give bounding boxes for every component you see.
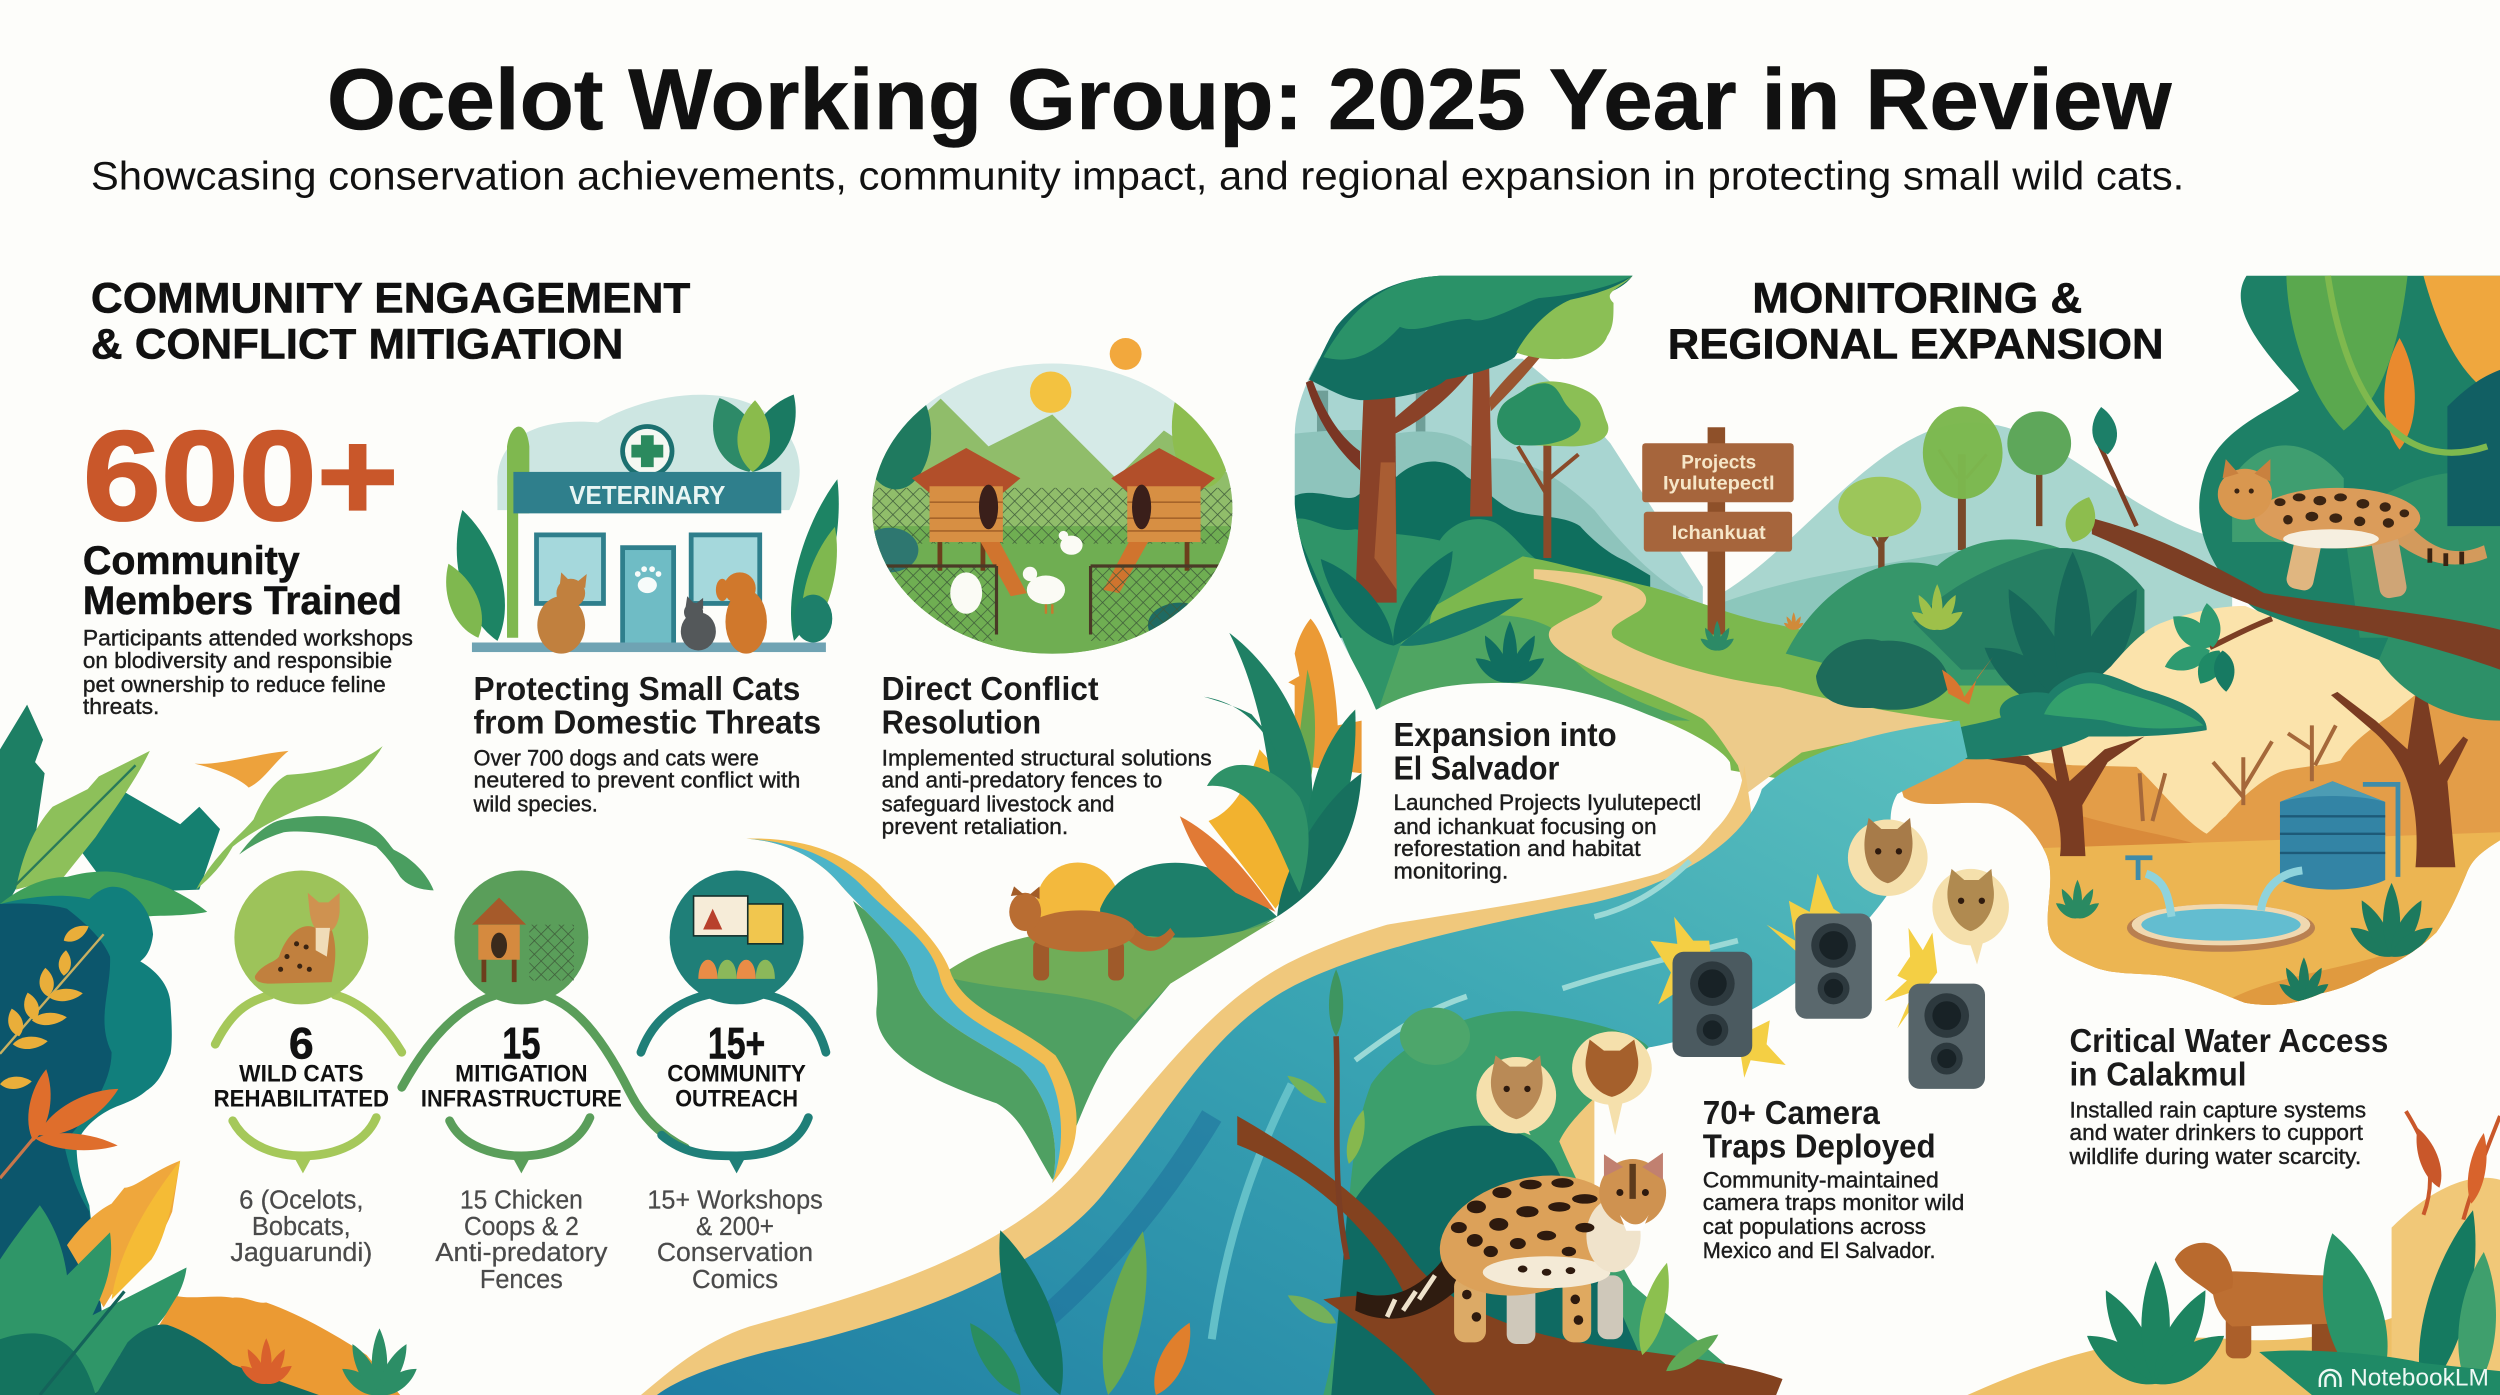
text block: protecting small cats: wild species. <box>473 791 598 816</box>
stat: mitigation infrastructure: Coops & 2 <box>464 1213 579 1241</box>
text block: direct conflict resolution: prevent retaliation. <box>882 814 1068 839</box>
illustration: main river <box>641 721 1967 1395</box>
tree: dry trees <box>1977 737 2144 856</box>
title: Ocelot Working Group: 2025 Year in Review <box>327 52 2173 148</box>
stat: mitigation infrastructure <box>402 870 686 1294</box>
text block: camera traps deployed <box>1703 1095 1964 1263</box>
stat: wild cats rehabilitated: WILD CATS <box>239 1061 364 1088</box>
stat: 600+ community members trained: pet ownership to reduce feline <box>83 672 386 697</box>
text block: direct conflict resolution <box>882 671 1212 839</box>
stat: mitigation infrastructure: 15 Chicken <box>460 1186 583 1214</box>
icon: detection bubble upper <box>1848 818 2009 965</box>
heading: monitoring: MONITORING & <box>1752 274 2082 322</box>
sprig: orange leaves <box>0 1068 124 1178</box>
stat: mitigation infrastructure: Anti-predatory <box>435 1239 608 1267</box>
illustration: green hill with ocelot on branch <box>1237 969 1783 1395</box>
text block: direct conflict resolution: and anti-predatory fences to <box>882 768 1162 793</box>
plant: savannah agave <box>2350 883 2433 957</box>
text block: expansion into El Salvador: and ichankuat focusing on <box>1393 814 1657 839</box>
logo: NotebookLM: NotebookLM <box>2350 1364 2489 1391</box>
label: veterinary sign: VETERINARY <box>569 482 725 510</box>
stat: wild cats rehabilitated: Bobcats, <box>252 1213 351 1241</box>
foliage: left jungle <box>0 705 434 1395</box>
stat: wild cats rehabilitated <box>214 870 402 1267</box>
text block: critical water access: wildlife during water scarcity. <box>2068 1144 2361 1169</box>
icon: flash bursts <box>1650 874 1937 1078</box>
icon: fence <box>885 566 996 641</box>
illustration: veterinary clinic <box>435 386 853 654</box>
sprig: yellow leaves <box>0 921 104 1090</box>
icon: water tank <box>2280 781 2398 890</box>
stat: wild cats rehabilitated: 6 (Ocelots, <box>239 1186 364 1214</box>
tree: small forest tree <box>1497 381 1608 558</box>
heading: monitoring <box>1668 274 2164 369</box>
text block: camera traps deployed: 70+ Camera <box>1703 1095 1880 1132</box>
stat: 600+ community members trained: 600+ <box>83 406 399 548</box>
stat: wild cats rehabilitated: 6 <box>289 1020 314 1069</box>
tree: forest midground <box>1786 407 2144 686</box>
text block: critical water access: Installed rain capture systems <box>2070 1098 2366 1123</box>
text block: expansion into El Salvador: El Salvador <box>1393 751 1559 788</box>
icon: comics and audience <box>694 896 783 979</box>
text block: expansion into El Salvador: monitoring. <box>1393 858 1508 883</box>
text block: critical water access <box>2068 1023 2388 1169</box>
text block: camera traps deployed: Traps Deployed <box>1703 1128 1936 1165</box>
icon: orange dog <box>716 572 767 654</box>
ocelot: on branch <box>2218 459 2487 600</box>
text block: direct conflict resolution: Direct Conflict <box>882 671 1099 708</box>
illustration: camera traps <box>1650 818 2009 1089</box>
heading: monitoring: REGIONAL EXPANSION <box>1668 321 2164 369</box>
stat: community outreach: Conservation <box>657 1239 813 1267</box>
leaf: orange yellow <box>67 1161 180 1307</box>
illustration: forest landscape <box>1295 276 2232 797</box>
stat: 600+ community members trained: on blodiversity and responsibie <box>83 648 392 673</box>
text block: camera traps deployed: cat populations across <box>1703 1214 1926 1239</box>
foliage: upper left leaves <box>0 705 434 933</box>
sign: project signpost <box>1642 427 1794 653</box>
text block: critical water access: Critical Water Access <box>2070 1023 2388 1060</box>
stat: community outreach: 15+ Workshops <box>647 1186 823 1214</box>
icon: orange bird <box>195 751 289 788</box>
text block: protecting small cats: from Domestic Threats <box>474 704 821 741</box>
heading: community engagement: COMMUNITY ENGAGEMENT <box>91 274 690 322</box>
text block: protecting small cats: neutered to prevent conflict with <box>474 768 800 793</box>
icon: chickens <box>950 531 1083 614</box>
text block: protecting small cats <box>473 671 821 816</box>
stat: 600+ community members trained: Community <box>83 539 300 583</box>
tree: big trunks and canopy <box>1306 276 1633 603</box>
sign: project signpost: Projects <box>1681 453 1756 474</box>
stat: 600+ community members trained: threats. <box>83 694 159 719</box>
text block: camera traps deployed: Community-maintained <box>1703 1168 1939 1193</box>
icon: left coop <box>912 448 1027 596</box>
text block: direct conflict resolution: Resolution <box>882 704 1041 741</box>
icon: camera trap 3 <box>1908 984 1985 1089</box>
icon: clinic cross <box>620 424 674 478</box>
text block: camera traps deployed: Mexico and El Salvador. <box>1703 1238 1936 1263</box>
foliage: bushes and plants <box>1309 543 2171 724</box>
text block: camera traps deployed: camera traps monitor wild <box>1703 1190 1964 1215</box>
text block: expansion into El Salvador: Launched Projects Iyulutepectl <box>1393 790 1701 815</box>
jaguarundi: central <box>1009 886 1175 980</box>
illustration: right canopy <box>2199 276 2500 701</box>
stat: community outreach: OUTREACH <box>675 1085 798 1112</box>
leaves: bottom green cluster <box>0 1205 196 1395</box>
text block: expansion into El Salvador: reforestation and habitat <box>1393 836 1641 861</box>
text block: expansion into El Salvador: Expansion into <box>1393 717 1617 754</box>
icon: orange sun <box>1110 338 1142 370</box>
text block: critical water access: in Calakmul <box>2070 1057 2246 1094</box>
text block: direct conflict resolution: safeguard livestock and <box>882 791 1114 816</box>
text block: protecting small cats: Over 700 dogs and cats were <box>474 745 759 770</box>
sign: project signpost: Ichankuat <box>1672 523 1766 544</box>
icon: tan cat <box>537 572 587 654</box>
icon: detection bubble cats <box>1476 1032 1652 1135</box>
icon: camera trap 1 <box>1673 952 1752 1057</box>
heading: community engagement: & CONFLICT MITIGATION <box>91 321 623 369</box>
stat: community outreach: Comics <box>692 1266 778 1294</box>
illustration: chicken coops and fence <box>872 338 1232 654</box>
stat: community outreach: COMMUNITY <box>667 1061 806 1088</box>
stat: wild cats rehabilitated: Jaguarundi) <box>230 1239 372 1267</box>
icon: paw <box>635 566 661 593</box>
illustration: tree branch with ocelot <box>2059 405 2500 721</box>
text block: protecting small cats: Protecting Small Cats <box>474 671 800 708</box>
subtitle: Showcasing conservation achievements, community impact, and regional expansion in protecting small wild cats. <box>91 155 2184 199</box>
icon: water drinker pond <box>2125 858 2315 952</box>
icon: sun <box>1030 371 1071 413</box>
stat: mitigation infrastructure: MITIGATION <box>455 1061 588 1088</box>
stat: mitigation infrastructure: Fences <box>480 1266 563 1294</box>
tree: green canopy over savannah <box>1920 672 2207 759</box>
stat: 600+ community members trained <box>83 406 413 719</box>
jaguarundi: lower right <box>2175 1243 2354 1362</box>
ocelot: large foreground ocelot <box>1355 1153 1666 1344</box>
icon: gray cat <box>681 596 716 650</box>
text block: direct conflict resolution: Implemented structural solutions <box>882 745 1212 770</box>
icon: seated wild cat <box>255 893 340 984</box>
foliage: leaves near centre <box>1180 619 1362 917</box>
panel: teal backdrop <box>0 887 172 1395</box>
stat: mitigation infrastructure: INFRASTRUCTURE <box>421 1085 622 1112</box>
hills: pale mountain <box>1714 422 2232 686</box>
illustration: white callout for expansion text <box>1371 683 1731 925</box>
icon: right coop <box>1103 448 1215 593</box>
text block: critical water access: and water drinkers to cupport <box>2070 1120 2364 1145</box>
stat: community outreach: & 200+ <box>696 1213 774 1241</box>
stat: mitigation infrastructure: 15 <box>502 1020 540 1069</box>
branch: lower tree branch <box>1237 1116 1783 1395</box>
stat: wild cats rehabilitated: REHABILITATED <box>214 1085 389 1112</box>
sign: project signpost: Iyulutepectl <box>1663 473 1775 494</box>
mound: orange hill <box>159 1296 400 1395</box>
illustration: central river and jaguarundi <box>746 838 1277 1183</box>
icon: camera trap 2 <box>1795 914 1872 1019</box>
foliage: leaves at bottom of river <box>960 1223 1201 1395</box>
stat: 600+ community members trained: Participants attended workshops <box>83 626 413 651</box>
stat: 600+ community members trained: Members Trained <box>83 579 402 623</box>
illustration: bottom right foliage and jaguarundi <box>1967 1111 2500 1395</box>
stat: community outreach: 15+ <box>708 1020 765 1069</box>
text block: expansion into El Salvador <box>1393 717 1701 883</box>
path: sand trail <box>1534 569 1953 794</box>
heading: community engagement <box>91 274 690 369</box>
panel: stat chain <box>214 870 826 1294</box>
stat: community outreach <box>641 870 826 1294</box>
illustration: dry savannah with water tank and drinker <box>1897 598 2500 1036</box>
icon: coop and fence <box>472 898 574 982</box>
